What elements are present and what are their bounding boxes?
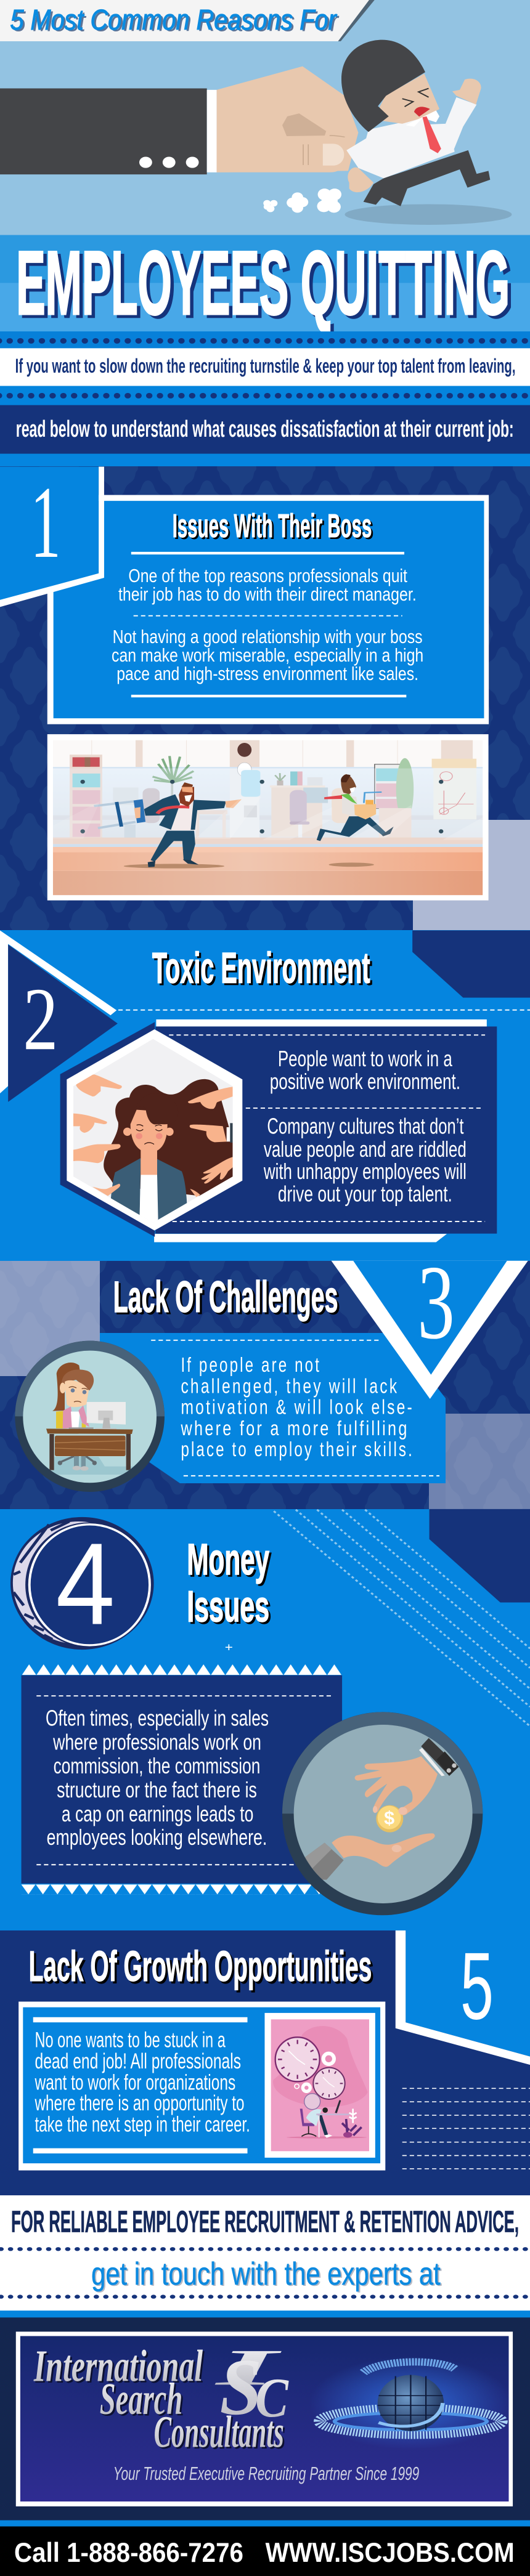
number V 3	[332, 1244, 528, 1399]
panel: reason 2 toxic environment	[0, 931, 530, 1242]
text card: dead end job! All professionals	[35, 2049, 241, 2073]
heading	[113, 1273, 340, 1324]
boss figure	[94, 782, 242, 867]
number flag 5	[396, 1930, 530, 2065]
logo panel: I	[215, 2339, 282, 2396]
panel: reason 3 lack of challenges	[100, 1244, 528, 1483]
logo panel: International	[33, 2341, 203, 2391]
illustration: office scene angry boss	[53, 740, 483, 895]
top banner: 5 Most Common Reasons For	[12, 6, 340, 38]
text panel: a cap on earnings leads to	[62, 1802, 253, 1826]
panel: reason 1 issues with boss	[0, 465, 489, 901]
top banner	[0, 0, 375, 41]
text card: One of the top reasons professionals quit	[128, 565, 407, 586]
text card: their job has to do with their direct manager.	[118, 583, 417, 604]
top banner: 5 Most Common Reasons For	[10, 4, 338, 36]
icon: globe	[309, 2357, 512, 2450]
heading: Money	[189, 1537, 271, 1586]
number flag 1	[0, 465, 104, 607]
logo panel: Consultants	[154, 2407, 284, 2457]
body text: where for a more fulfilling	[181, 1416, 409, 1440]
body text: If people are not	[181, 1353, 321, 1376]
text panel: commission, the commission	[54, 1754, 260, 1778]
number flag 2: 2	[23, 969, 58, 1069]
footer contact bar: Call 1-888-866-7276	[14, 2537, 243, 2568]
illustration: bored worker at desk	[15, 1341, 165, 1492]
text card: No one wants to be stuck in a	[35, 2028, 226, 2052]
illustration: hands passing coin	[282, 1712, 483, 1915]
heading	[152, 944, 372, 994]
runner figure	[317, 774, 394, 841]
number flag 2	[0, 931, 118, 1102]
text card: want to work for organizations	[35, 2071, 235, 2094]
text panel: Often times, especially in sales	[46, 1706, 269, 1731]
number coin 4: 4	[56, 1519, 115, 1649]
text card: where there is an opportunity to	[35, 2091, 245, 2115]
closing call to action	[0, 2193, 530, 2576]
logo panel: C	[255, 2367, 289, 2429]
number V 3: 3	[417, 1244, 455, 1361]
heading: Money	[187, 1535, 269, 1584]
number flag 1: 1	[30, 465, 61, 579]
text panel	[22, 1675, 342, 1884]
body text: challenged, they will lack	[181, 1374, 399, 1398]
logo panel	[0, 2317, 530, 2521]
heading: Issues	[189, 1584, 271, 1633]
logo panel: Search	[100, 2374, 182, 2424]
body text	[181, 1353, 439, 1476]
text card	[47, 495, 489, 724]
logo panel: Search	[102, 2376, 184, 2426]
heading	[29, 1943, 374, 1993]
logo panel: Consultants	[155, 2408, 285, 2459]
illustration: hand grabbing employee	[0, 40, 512, 225]
header section	[0, 0, 530, 454]
text card: take the next step in their career.	[35, 2113, 250, 2136]
heading	[187, 1535, 271, 1633]
logo panel: International	[35, 2343, 205, 2392]
text card	[18, 2002, 385, 2171]
illustration: hands passing coin: $	[384, 1808, 394, 1829]
panel: reason 5 lack of growth	[18, 1930, 530, 2171]
number coin 4	[10, 1517, 154, 1650]
text panel: employees looking elsewhere.	[47, 1826, 267, 1850]
illustration: clocks and exhausted worker	[271, 2019, 369, 2151]
panel: reason 4 money issues	[10, 1517, 342, 1884]
footer contact bar	[0, 2526, 530, 2576]
intro band	[0, 331, 530, 454]
heading: Issues	[187, 1582, 269, 1631]
text panel: where professionals work on	[52, 1730, 261, 1755]
text panel	[60, 1019, 497, 1242]
illustration: hexagon stressed woman	[67, 1029, 242, 1231]
text panel: structure or the fact there is	[57, 1778, 257, 1803]
logo panel: S	[220, 2343, 262, 2432]
decorative navy corner and diagonals	[274, 1509, 530, 1726]
